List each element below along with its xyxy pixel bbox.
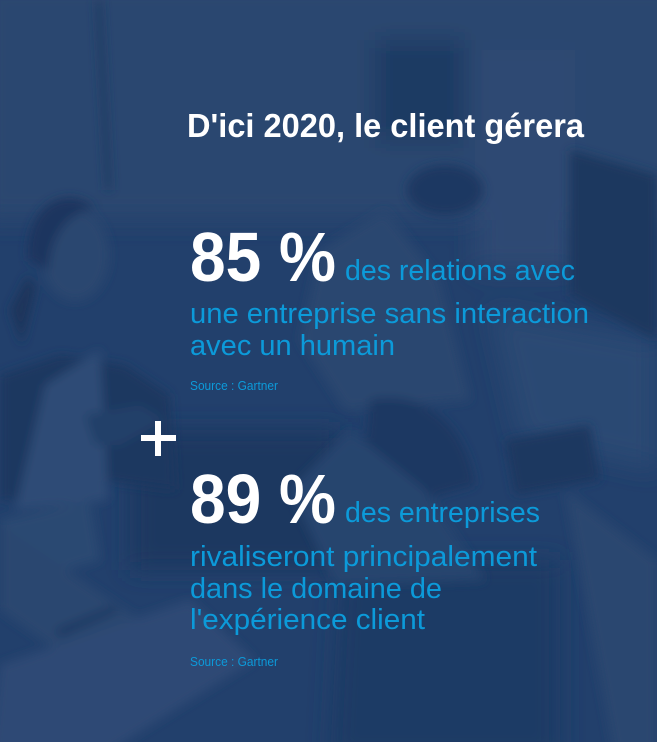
text: concurrence sur l'expérience client: dans le domaine de xyxy=(190,573,442,605)
text: concurrence sur l'expérience client xyxy=(190,497,540,636)
icon: plus sign xyxy=(141,421,176,456)
text: concurrence sur l'expérience client: l'expérience client xyxy=(190,604,425,636)
number: 85 %: 85 % xyxy=(190,218,336,296)
text: relations sans interaction humaine: des relations avec xyxy=(345,255,575,287)
title: D'ici 2020, le client gérera xyxy=(187,107,585,144)
text: relations sans interaction humaine xyxy=(190,255,589,362)
text: relations sans interaction humaine: avec un humain xyxy=(190,330,395,362)
number: 89 %: 89 % xyxy=(190,460,336,538)
statistic block: 85 % xyxy=(190,218,589,393)
statistic block: 89 % xyxy=(190,460,540,669)
source: Source : Gartner xyxy=(190,655,278,669)
text: concurrence sur l'expérience client: rivaliseront principalement xyxy=(190,541,537,573)
text: relations sans interaction humaine: une entreprise sans interaction xyxy=(190,298,589,330)
text: concurrence sur l'expérience client: des entreprises xyxy=(345,497,540,529)
source: Source : Gartner xyxy=(190,379,278,393)
